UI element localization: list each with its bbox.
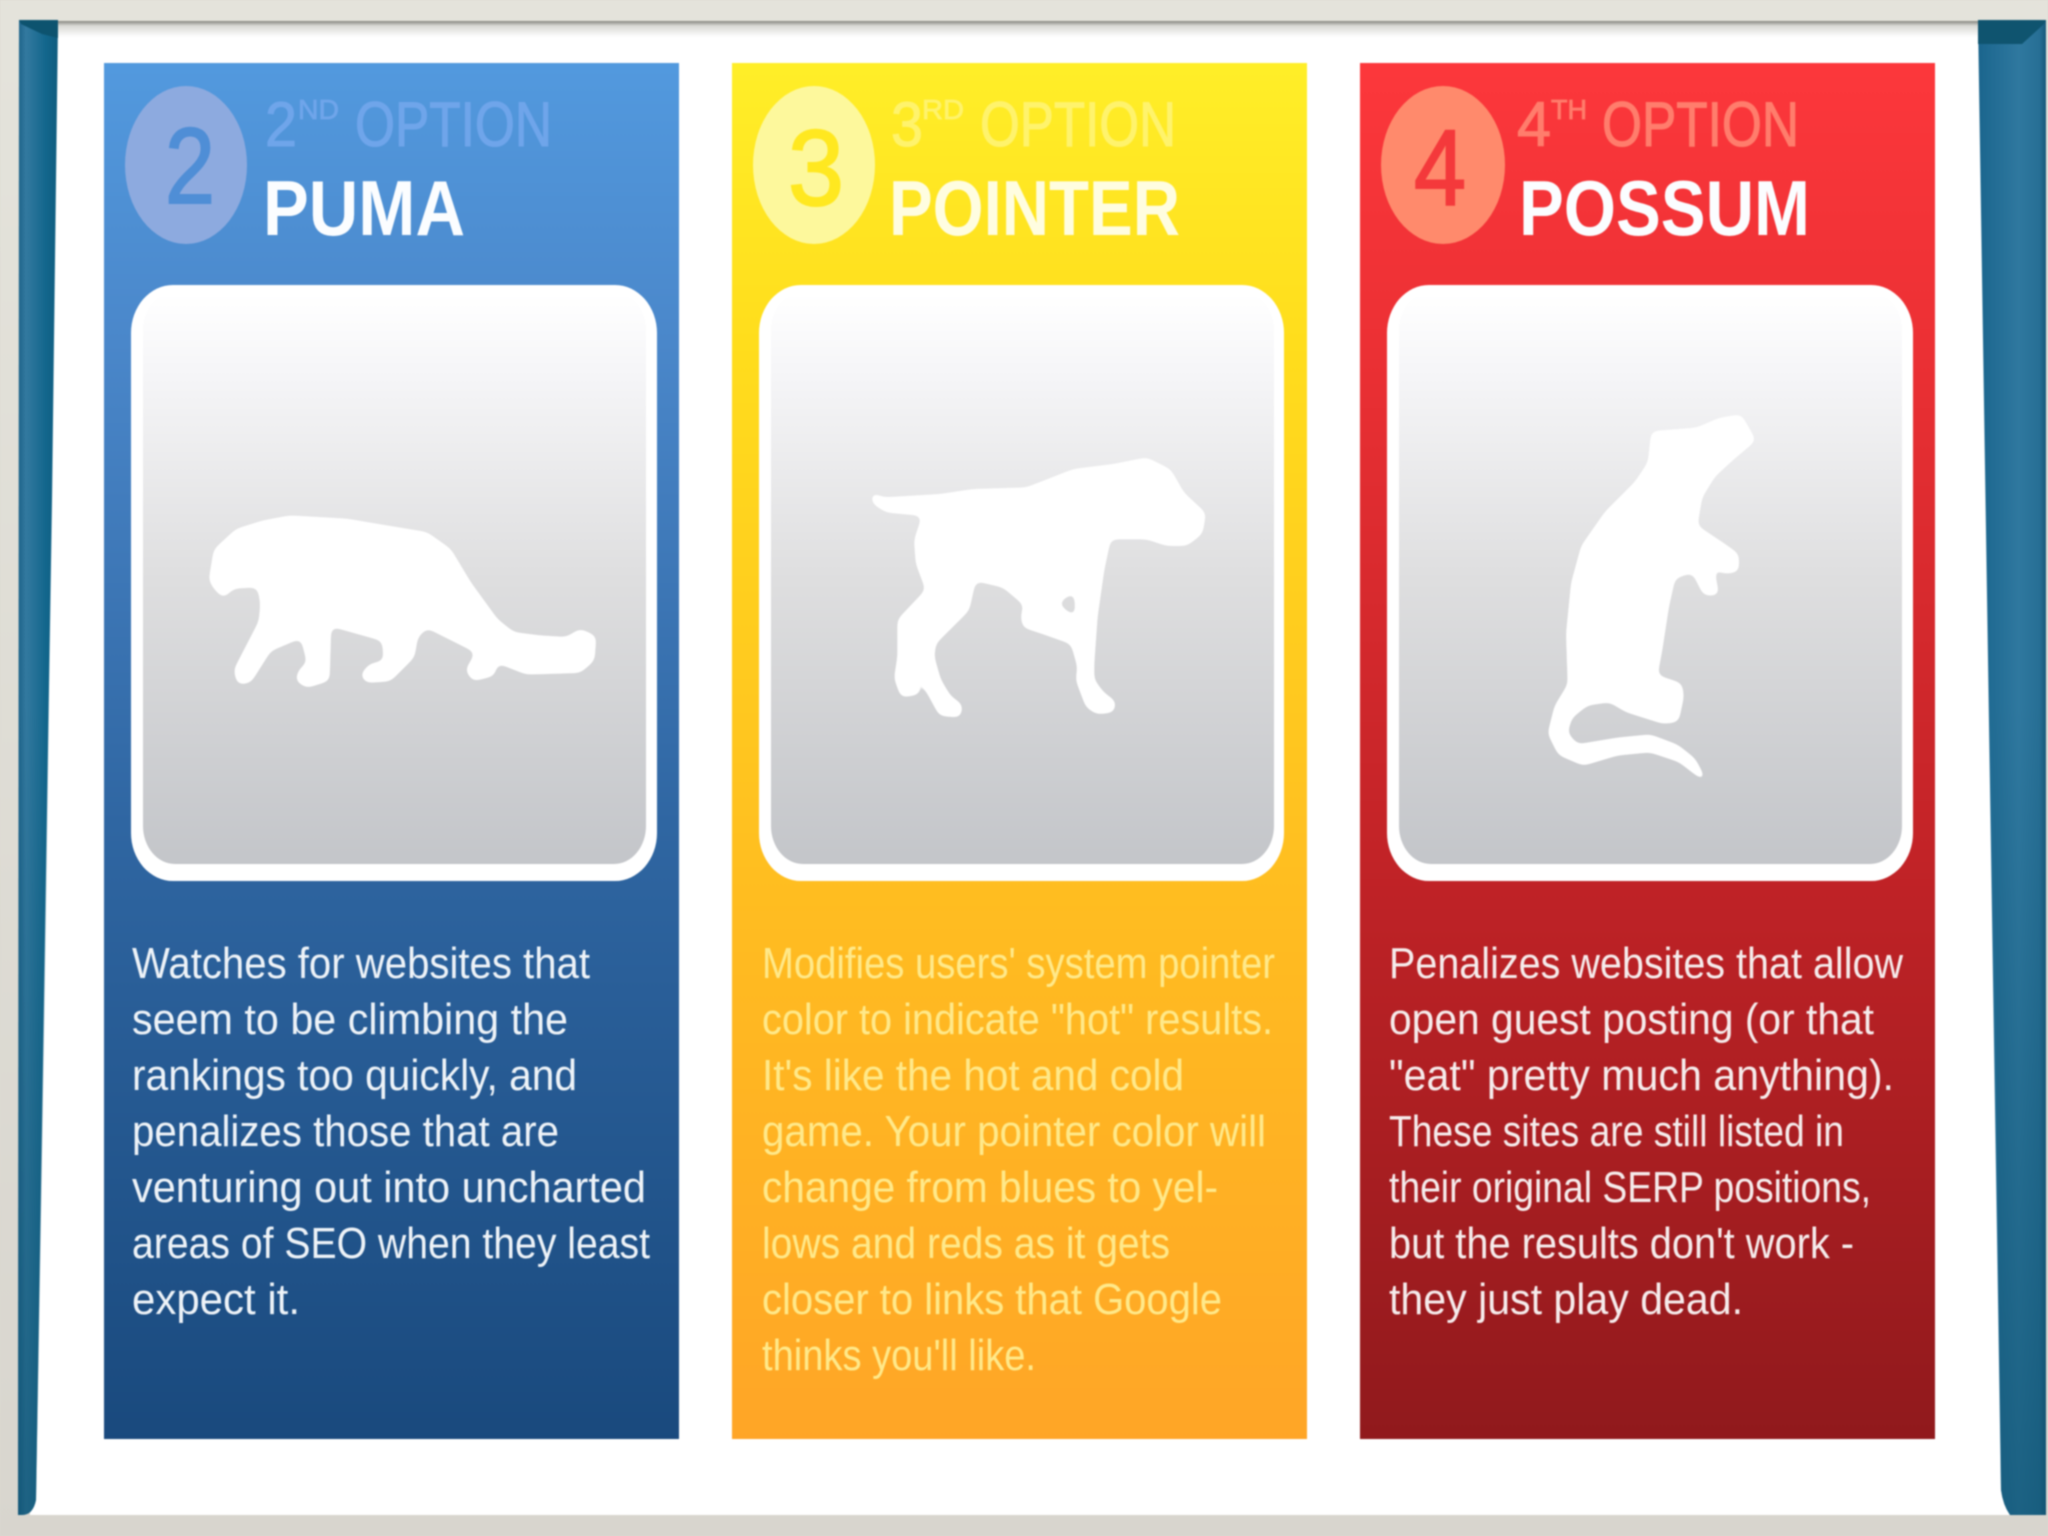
panel background blue [104, 63, 679, 1439]
icon: puma silhouette [210, 517, 595, 687]
description: possum: but the results don't work - [1389, 1219, 1854, 1268]
label: 3rd option [891, 90, 1176, 160]
label: 3rd option: RD [922, 94, 964, 125]
description: possum: they just play dead. [1389, 1275, 1743, 1324]
description: possum: These sites are still listed in [1389, 1107, 1844, 1156]
number badge 4 [1381, 86, 1505, 244]
name: puma: PUMA [263, 164, 465, 252]
label: 2nd option [265, 90, 552, 160]
number badge 4: 4 [1414, 107, 1466, 228]
icon: pointer dog silhouette [872, 458, 1205, 717]
panel background yellow [732, 63, 1307, 1439]
description: possum: "eat" pretty much anything). [1389, 1051, 1894, 1100]
number badge 2: 2 [165, 105, 215, 226]
description: pointer: It's like the hot and cold [762, 1051, 1184, 1100]
number badge 3: 3 [788, 107, 844, 228]
description: pointer: closer to links that Google [762, 1275, 1222, 1324]
description: pointer [762, 939, 1275, 1380]
description: puma: Watches for websites that [132, 939, 590, 988]
icon: possum silhouette [1550, 417, 1753, 778]
image card [759, 285, 1284, 881]
description: puma: expect it. [132, 1275, 300, 1324]
description: puma: areas of SEO when they least [132, 1219, 650, 1268]
description: possum: open guest posting (or that [1389, 995, 1874, 1044]
description: puma [132, 939, 650, 1324]
name: possum: POSSUM [1519, 164, 1810, 252]
description: pointer: game. Your pointer color will [762, 1107, 1266, 1156]
panel: pointer [732, 63, 1307, 1439]
name: pointer: POINTER [889, 164, 1180, 252]
label: 2nd option: 2 [265, 90, 297, 160]
description: puma: penalizes those that are [132, 1107, 559, 1156]
description: possum: Penalizes websites that allow [1389, 939, 1903, 988]
label: 3rd option: 3 [891, 90, 923, 160]
label: 4th option: OPTION [1602, 90, 1799, 160]
description: possum [1389, 939, 1903, 1324]
right side bar [1978, 20, 2046, 1515]
number badge 3 [753, 86, 875, 244]
label: 2nd option: OPTION [355, 90, 552, 160]
label: 4th option [1517, 90, 1799, 160]
description: puma: rankings too quickly, and [132, 1051, 577, 1100]
label: 3rd option: OPTION [980, 90, 1176, 160]
description: puma: seem to be climbing the [132, 995, 568, 1044]
description: pointer: thinks you'll like. [762, 1331, 1036, 1380]
image card [131, 285, 657, 881]
panel: puma [104, 63, 679, 1439]
image card [1387, 285, 1913, 881]
left side bar [18, 20, 58, 1515]
description: pointer: lows and reds as it gets [762, 1219, 1170, 1268]
description: puma: venturing out into uncharted [132, 1163, 646, 1212]
description: pointer: color to indicate "hot" results. [762, 995, 1273, 1044]
label: 4th option: 4 [1517, 90, 1551, 160]
label: 4th option: TH [1551, 94, 1587, 125]
label: 2nd option: ND [298, 94, 339, 125]
description: pointer: Modifies users' system pointer [762, 939, 1275, 988]
description: possum: their original SERP positions, [1389, 1163, 1871, 1212]
number badge 2 [125, 86, 247, 244]
panel background red [1360, 63, 1935, 1439]
description: pointer: change from blues to yel- [762, 1163, 1218, 1212]
panel: possum [1360, 63, 1935, 1439]
